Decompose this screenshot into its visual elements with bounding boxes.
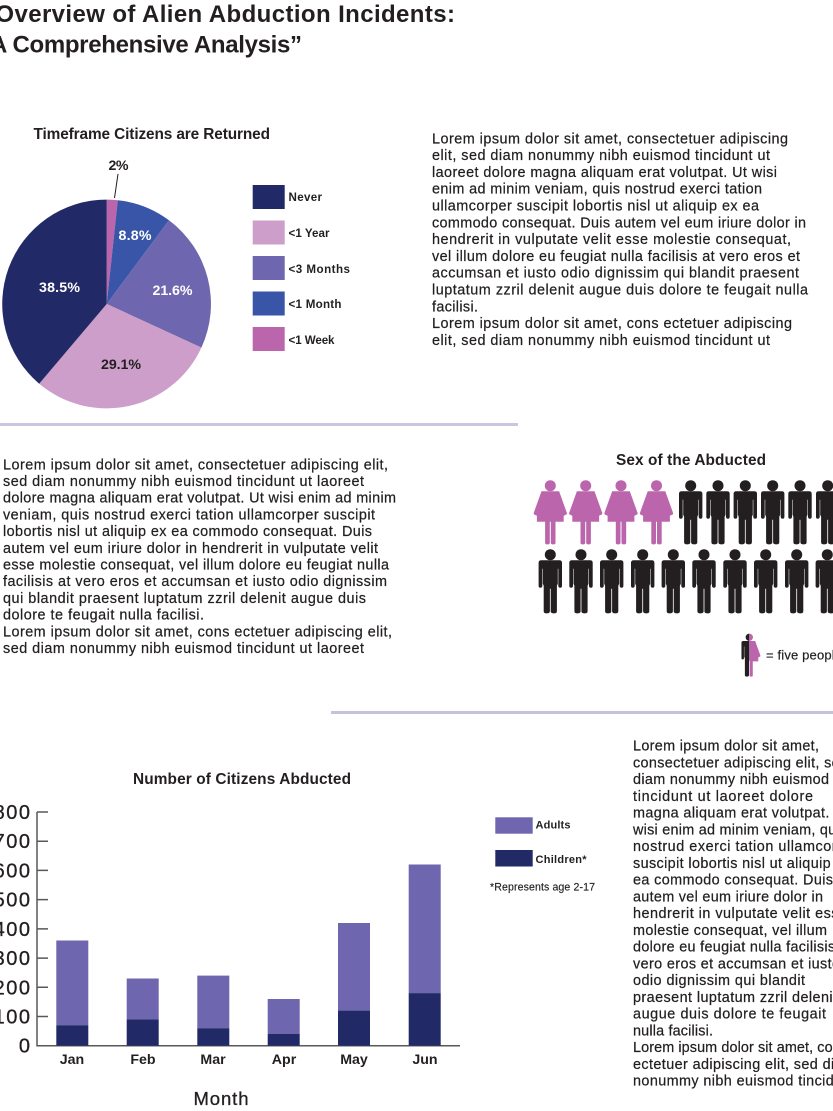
pie legend — [253, 185, 350, 351]
month labels — [60, 1052, 438, 1068]
text block: bottom right: ea commodo consequat. Duis — [633, 873, 833, 889]
month labels: Jun — [412, 1052, 438, 1068]
pie legend: <1 Year — [288, 227, 330, 240]
x-axis title: Month — [194, 1088, 248, 1109]
y-axis labels — [0, 802, 32, 1058]
text block: top right: accumsan et iusto odio dignissim qui blandit praesent — [432, 266, 799, 282]
text block: middle left: dolore te feugait nulla facilisi. — [3, 608, 204, 624]
text block: bottom right: Lorem ipsum dolor sit amet, — [633, 739, 819, 755]
text block: top right: Lorem ipsum dolor sit amet, consectetuer adipiscing — [432, 131, 788, 147]
panel: bar chart — [0, 771, 595, 1109]
text block: middle left: autem vel eum iriure dolor in hendrerit in vulputate velit — [3, 541, 378, 557]
panel: timeframe pie chart — [2, 126, 350, 408]
pictogram key — [738, 634, 833, 677]
pie legend: <1 Week — [288, 334, 335, 347]
text block: middle left: facilisis at vero eros et accumsan et iusto odio dignissim — [3, 574, 387, 590]
pie legend: <1 Month — [288, 298, 342, 311]
pie chart: 38.5% — [39, 280, 80, 296]
pie chart: 8.8% — [118, 228, 152, 244]
heading: sex of the abducted: Sex of the Abducted — [616, 452, 766, 469]
chart axes — [37, 812, 460, 1046]
text block: middle left: esse molestie consequat, vel illum dolore eu feugiat nulla — [3, 558, 389, 574]
y-axis labels: 0 — [19, 1036, 32, 1058]
pie legend: <3 Months — [288, 263, 350, 276]
text block: middle left: qui blandit praesent luptatum zzril delenit augue duis — [3, 591, 366, 607]
pie chart: 21.6% — [152, 283, 193, 299]
text block: top right: Lorem ipsum dolor sit amet, cons ectetuer adipiscing — [432, 316, 792, 332]
panel: sex of the abducted pictogram — [534, 452, 833, 677]
month labels: Mar — [200, 1052, 226, 1068]
month labels: Apr — [272, 1052, 297, 1068]
pie chart — [2, 158, 211, 408]
bar legend: Adults — [536, 820, 570, 832]
text block: middle left: dolore magna aliquam erat volutpat. Ut wisi enim ad minim — [3, 491, 396, 507]
bar legend: Children* — [536, 854, 587, 866]
title — [0, 1, 455, 58]
text block: middle left — [3, 457, 396, 657]
heading: number of citizens abducted: Number of Citizens Abducted — [133, 771, 351, 788]
text block: top right: ullamcorper suscipit lobortis nisl ut aliquip ex ea — [432, 198, 759, 214]
pictogram: top row — [534, 480, 833, 544]
text block: top right: elit, sed diam nonummy nibh euismod tincidunt ut — [432, 333, 770, 349]
month labels: Feb — [130, 1052, 156, 1068]
text block: top right: laoreet dolore magna aliquam erat volutpat. Ut wisi — [432, 165, 777, 181]
month labels: Jan — [60, 1052, 84, 1068]
text block: top right: hendrerit in vulputate velit esse molestie consequat, — [432, 232, 791, 248]
text block: bottom right — [632, 739, 833, 1090]
text block: top right: vel illum dolore eu feugiat nulla facilisis at vero eros et — [432, 249, 800, 265]
text block: top right: elit, sed diam nonummy nibh euismod tincidunt ut — [432, 148, 770, 164]
month labels: May — [340, 1052, 368, 1068]
text block: middle left: Lorem ipsum dolor sit amet, consectetuer adipiscing elit, — [3, 457, 388, 473]
pictogram: bottom row — [539, 549, 833, 613]
text block: middle left: sed diam nonummy nibh euismod tincidunt ut laoreet — [3, 641, 364, 657]
text block: top right: enim ad minim veniam, quis nostrud exerci tation — [432, 182, 762, 198]
text block: middle left: veniam, quis nostrud exerci tation ullamcorper suscipit — [3, 507, 375, 523]
text block: bottom right: diam nonummy nibh euismod — [633, 772, 829, 788]
heading: timeframe: Timeframe Citizens are Returned — [34, 126, 270, 143]
text block: bottom right: augue duis dolore te feugait — [633, 1007, 826, 1023]
bar legend: *Represents age 2-17 — [490, 882, 595, 894]
text block: bottom right: molestie consequat, vel illum — [633, 923, 827, 939]
stacked bars — [56, 864, 441, 1046]
text block: bottom right: tincidunt ut laoreet dolore — [633, 789, 813, 805]
text block: middle left: lobortis nisl ut aliquip ex ea commodo consequat. Duis — [3, 524, 372, 540]
text block: middle left: Lorem ipsum dolor sit amet, cons ectetuer adipiscing elit, — [3, 624, 392, 640]
text block: bottom right: praesent luptatum zzril delenit — [633, 990, 833, 1006]
pie legend: Never — [288, 191, 322, 204]
pie chart: 2% — [108, 158, 129, 174]
text block: top right — [432, 131, 808, 349]
text block: top right: facilisi. — [432, 299, 478, 315]
text block: bottom right: autem vel eum iriure dolor in — [633, 890, 823, 906]
text block: bottom right: odio dignissim qui blandit — [633, 973, 805, 989]
text block: middle left: sed diam nonummy nibh euismod tincidunt ut laoreet — [3, 474, 364, 490]
bar legend — [490, 817, 595, 894]
text block: top right: luptatum zzril delenit augue duis dolore te feugait nulla — [432, 282, 808, 298]
pie chart: 29.1% — [101, 357, 141, 373]
text block: bottom right: nulla facilisi. — [633, 1024, 713, 1040]
text block: top right: commodo consequat. Duis autem vel eum iriure dolor in — [432, 215, 806, 231]
